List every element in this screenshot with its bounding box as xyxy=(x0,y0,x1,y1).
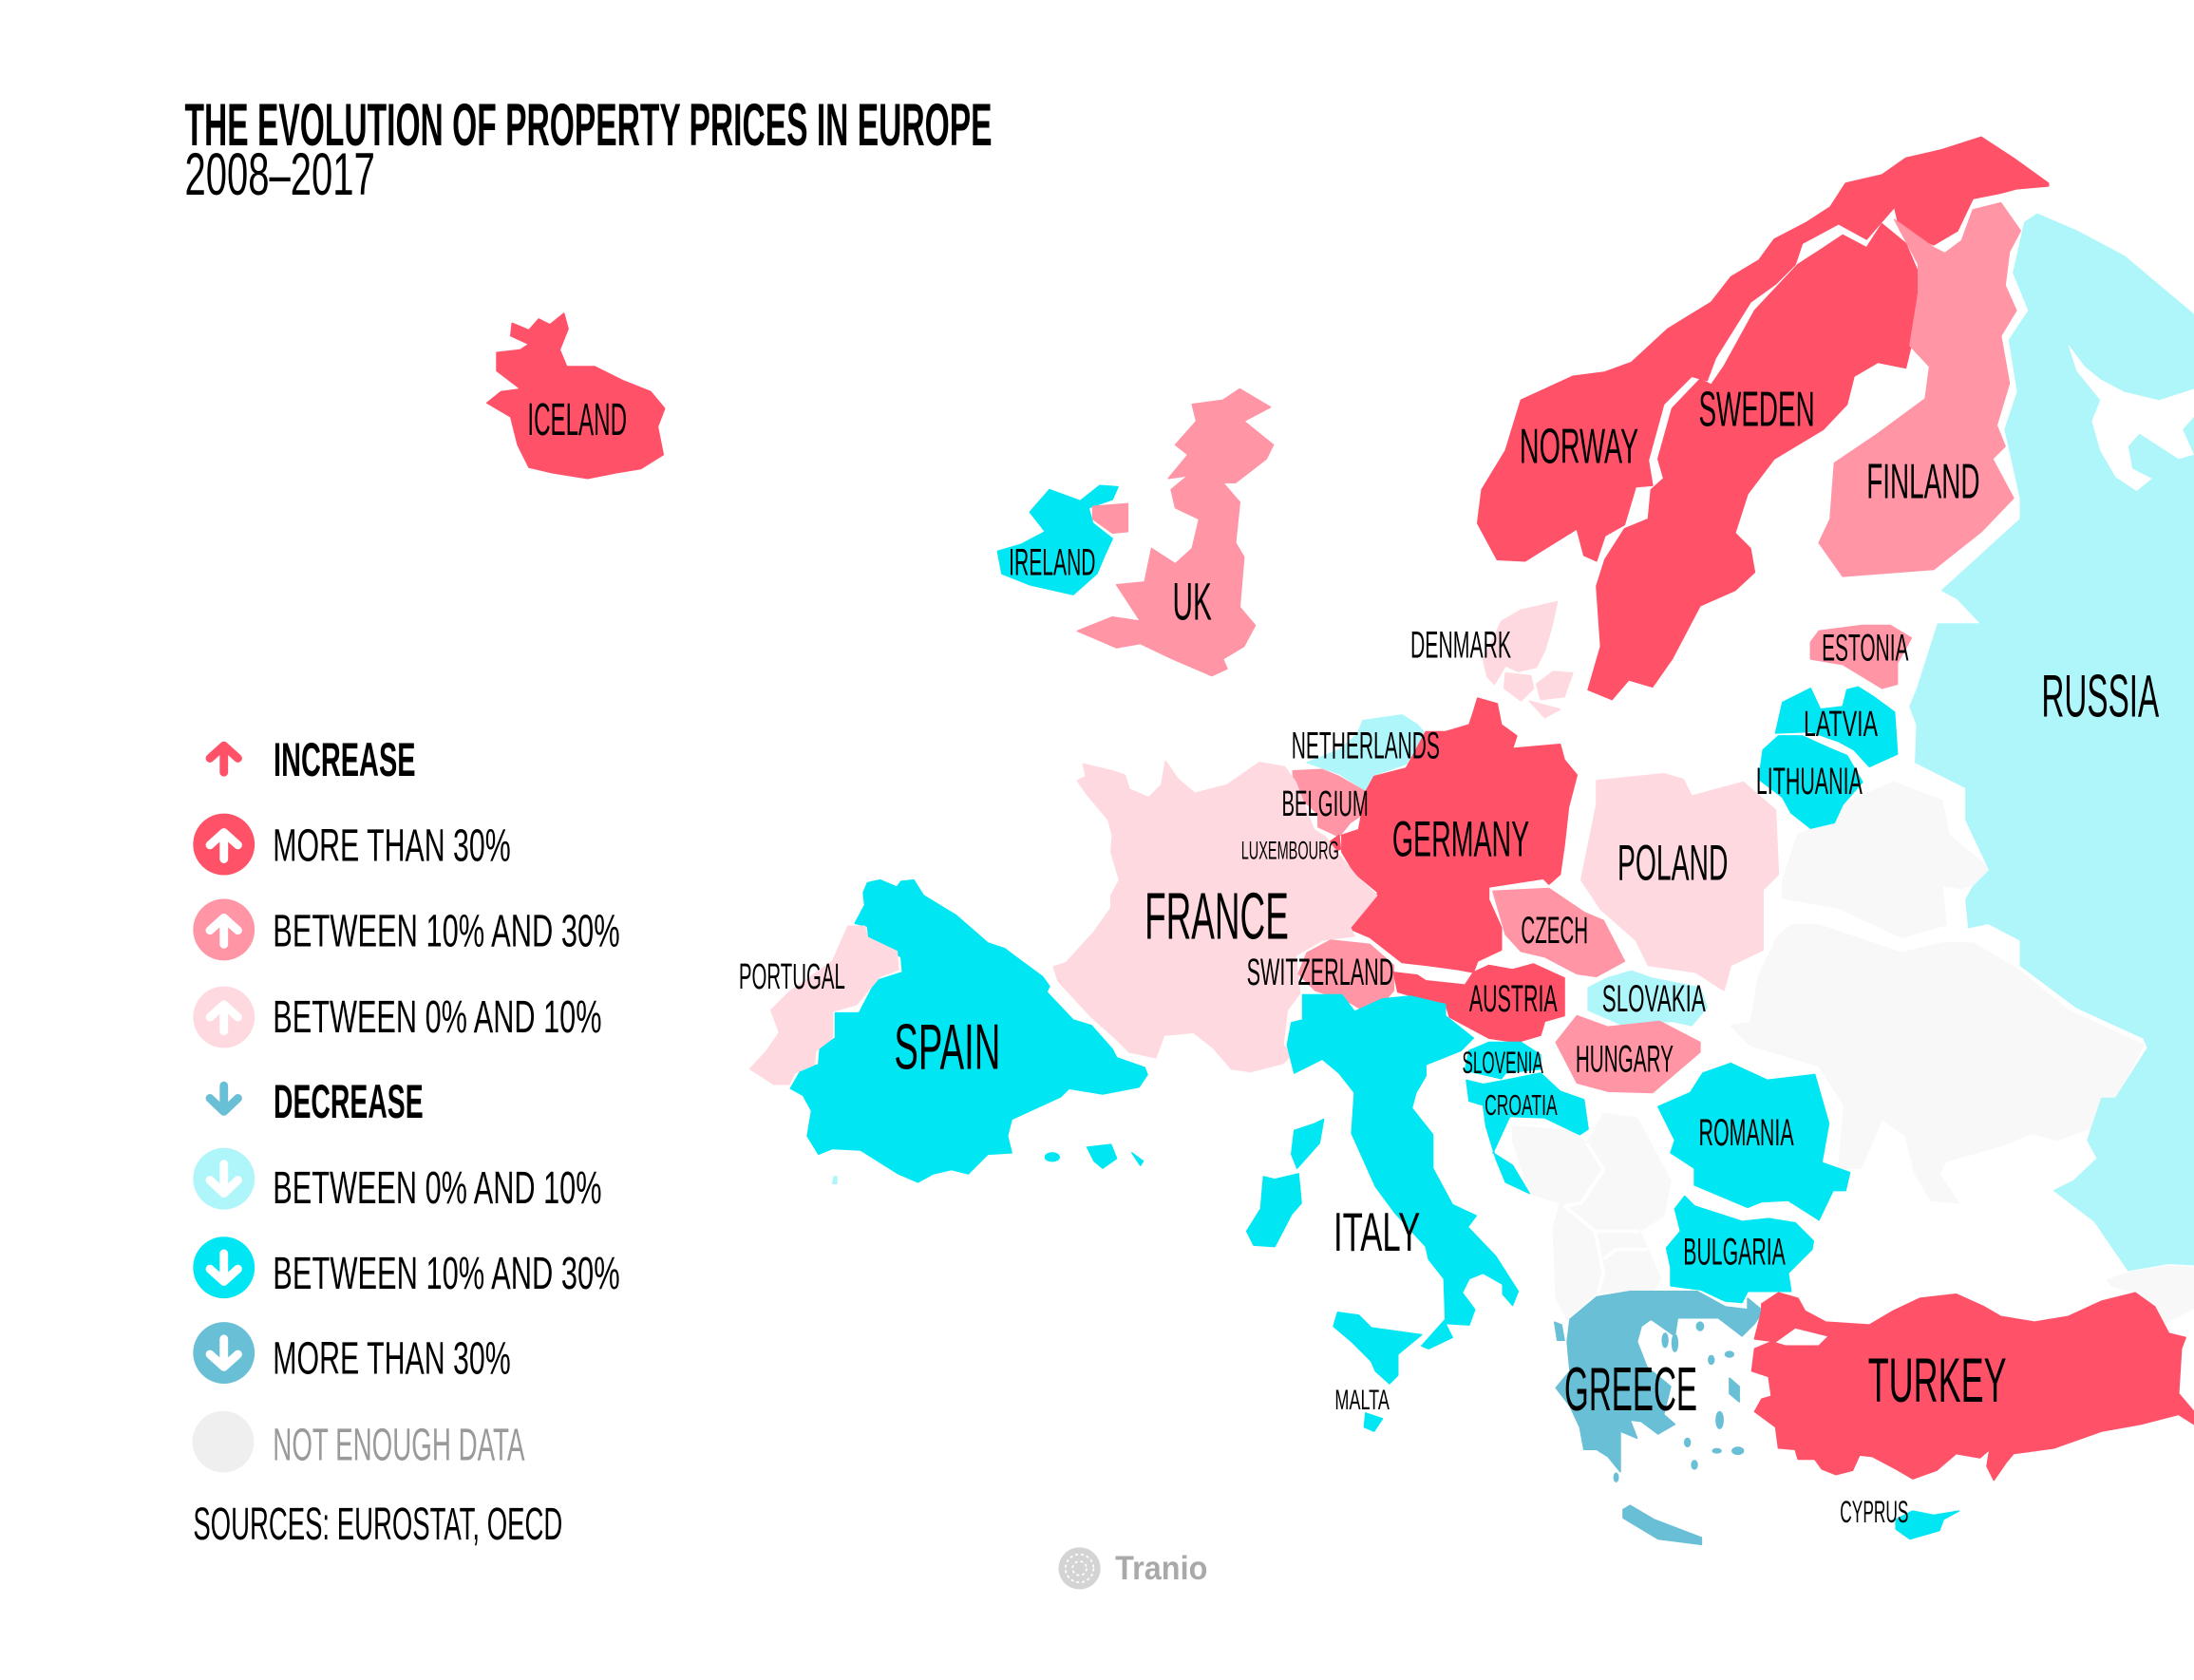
legend: not enough data: NOT ENOUGH DATA xyxy=(273,1419,525,1470)
Finland xyxy=(1819,203,2020,576)
Latvia xyxy=(1775,687,1898,766)
Slovenia xyxy=(1465,1043,1541,1079)
islet south of Spain xyxy=(833,1177,837,1183)
legend: 0-10% decrease xyxy=(193,1148,601,1214)
Sardinia xyxy=(1247,1174,1301,1247)
Bulgaria xyxy=(1667,1197,1813,1303)
country labels: GERMANY xyxy=(1392,812,1529,868)
country labels: CYPRUS xyxy=(1840,1495,1908,1529)
country labels: SLOVAKIA xyxy=(1602,978,1706,1020)
legend: 10-30% increase: BETWEEN 10% AND 30% xyxy=(273,906,620,957)
Denmark xyxy=(1484,601,1573,718)
country labels: SWEDEN xyxy=(1698,382,1815,437)
White Sea xyxy=(2068,344,2194,491)
legend: more than 30% increase: MORE THAN 30% xyxy=(273,821,511,872)
country labels: ROMANIA xyxy=(1698,1112,1794,1154)
country labels: BELGIUM xyxy=(1281,783,1369,824)
legend xyxy=(193,733,620,1550)
subtitle: period: 2008–2017 xyxy=(184,142,375,208)
Ireland xyxy=(997,485,1118,595)
Netherlands xyxy=(1307,715,1425,790)
legend: 0-10% increase: BETWEEN 0% AND 10% xyxy=(273,991,601,1043)
legend: increase heading: INCREASE xyxy=(274,733,416,786)
Czech Republic xyxy=(1493,888,1624,976)
country labels: SWITZERLAND xyxy=(1247,952,1393,993)
sources: SOURCES: EUROSTAT, OECD xyxy=(193,1499,562,1550)
Lithuania xyxy=(1759,736,1863,828)
legend: more than 30% decrease xyxy=(193,1322,511,1385)
Romania xyxy=(1658,1064,1850,1220)
Slovakia xyxy=(1588,971,1707,1026)
legend: increase heading xyxy=(210,733,416,786)
country labels: NETHERLANDS xyxy=(1292,725,1440,766)
country labels: DENMARK xyxy=(1410,624,1511,666)
country labels: AUSTRIA xyxy=(1469,978,1558,1020)
legend: more than 30% decrease: MORE THAN 30% xyxy=(273,1333,511,1385)
France xyxy=(1053,761,1377,1071)
country labels: MALTA xyxy=(1334,1385,1390,1416)
Switzerland xyxy=(1298,940,1393,1010)
country labels: NORWAY xyxy=(1520,419,1638,474)
Estonia xyxy=(1810,626,1911,689)
legend: 0-10% decrease: BETWEEN 0% AND 10% xyxy=(273,1162,601,1214)
Luxembourg xyxy=(1330,835,1340,852)
Russia xyxy=(1910,214,2194,1271)
country labels: ITALY xyxy=(1333,1202,1420,1263)
country labels: CZECH xyxy=(1521,910,1588,952)
country labels: LUXEMBOURG xyxy=(1241,837,1339,865)
Austria xyxy=(1393,964,1564,1043)
Belgium xyxy=(1293,769,1366,837)
country labels: SPAIN xyxy=(894,1012,1000,1084)
Italy xyxy=(1247,994,1518,1384)
country labels xyxy=(527,382,2160,1529)
Norway xyxy=(1478,137,2049,561)
country labels: GREECE xyxy=(1564,1354,1697,1424)
legend: 0-10% increase xyxy=(193,987,601,1048)
title: THE EVOLUTION OF PROPERTY PRICES IN EUROPE xyxy=(184,92,993,159)
Hungary xyxy=(1556,1016,1700,1093)
country labels: POLAND xyxy=(1617,836,1728,892)
country labels: IRELAND xyxy=(1009,541,1096,583)
Crete xyxy=(1623,1505,1701,1544)
Tranio logo xyxy=(1058,1547,1207,1590)
Sicily xyxy=(1333,1312,1422,1384)
UK xyxy=(1077,389,1274,676)
balkan borders xyxy=(1564,1143,1648,1293)
Spain xyxy=(790,880,1147,1182)
legend: 10-30% decrease xyxy=(193,1236,620,1299)
legend: 10-30% decrease: BETWEEN 10% AND 30% xyxy=(273,1248,620,1299)
country labels: CROATIA xyxy=(1485,1088,1558,1122)
legend: decrease heading xyxy=(210,1075,424,1128)
country labels: FINLAND xyxy=(1866,453,1980,508)
country labels: TURKEY xyxy=(1868,1346,2007,1416)
Corsica xyxy=(1292,1120,1324,1168)
Malta xyxy=(1364,1413,1383,1431)
Tranio logo: Tranio xyxy=(1115,1550,1207,1587)
country labels: UK xyxy=(1173,572,1212,632)
country labels: BULGARIA xyxy=(1683,1232,1786,1274)
Sweden xyxy=(1588,224,1919,700)
legend: more than 30% increase xyxy=(193,814,511,875)
country labels: HUNGARY xyxy=(1576,1038,1674,1080)
title xyxy=(184,92,993,208)
country labels: LITHUANIA xyxy=(1756,761,1863,802)
Croatia xyxy=(1466,1073,1588,1194)
Iceland xyxy=(487,313,665,479)
Germany xyxy=(1342,698,1577,972)
Turkey xyxy=(1751,1293,2194,1481)
map of Europe xyxy=(487,137,2194,1544)
Cyprus xyxy=(1896,1511,1958,1539)
country labels: FRANCE xyxy=(1144,879,1289,953)
icon: logo globe xyxy=(1058,1547,1101,1590)
country labels: LATVIA xyxy=(1804,704,1878,745)
legend: not enough data xyxy=(193,1411,525,1473)
Poland xyxy=(1581,774,1778,991)
legend: 10-30% increase xyxy=(193,899,620,960)
country labels: PORTUGAL xyxy=(739,956,845,997)
Greece xyxy=(1555,1292,1763,1544)
country labels: ESTONIA xyxy=(1822,627,1909,669)
country labels: ICELAND xyxy=(527,394,627,445)
no data countries xyxy=(1513,783,2194,1324)
Portugal xyxy=(750,926,898,1085)
legend: decrease heading: DECREASE xyxy=(274,1075,424,1128)
country labels: SLOVENIA xyxy=(1463,1046,1543,1080)
